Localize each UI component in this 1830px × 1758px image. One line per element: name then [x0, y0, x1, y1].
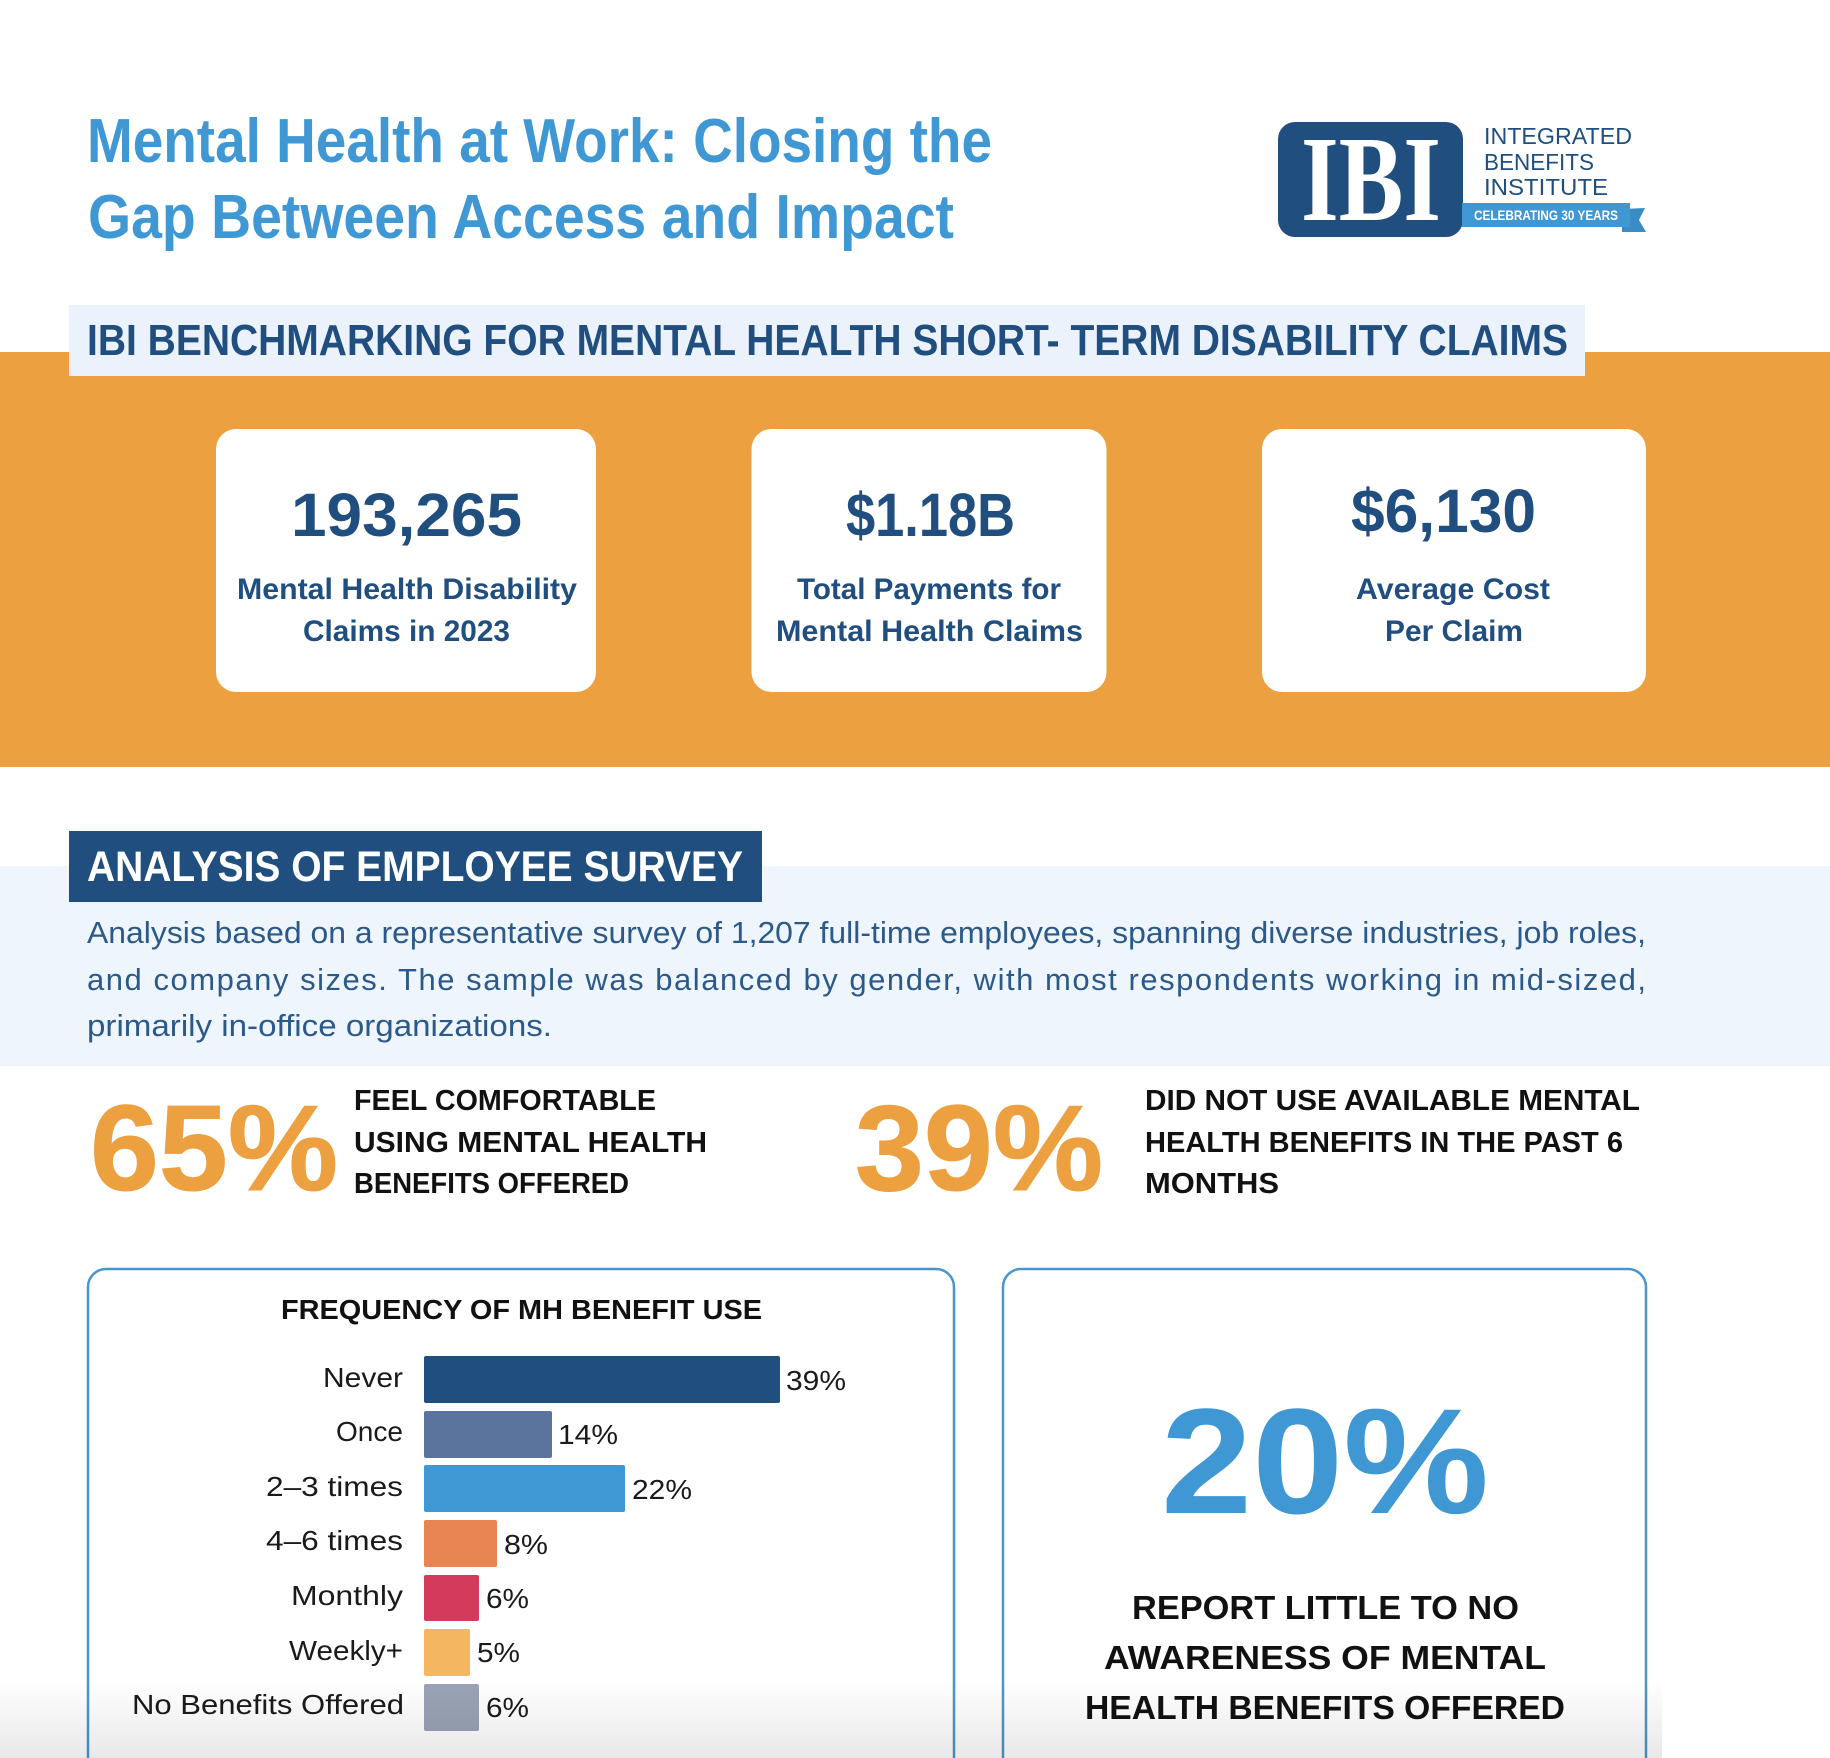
stat: 65% comfortable: FEEL COMFORTABLE — [354, 1085, 656, 1117]
panel: frequency bar chart — [88, 1269, 954, 1758]
bar: Never: 39% — [786, 1365, 846, 1396]
stat card: claims: 193,265 — [291, 481, 522, 549]
logo: IBI: INSTITUTE — [1484, 174, 1608, 200]
logo: IBI: CELEBRATING 30 YEARS — [1474, 207, 1618, 223]
heading: benchmarking: IBI BENCHMARKING FOR MENTAL HEALTH SHORT- TERM DISABILITY CLAIMS — [87, 316, 1568, 365]
stat card: total payments — [752, 429, 1106, 692]
stat: 39% did not use — [855, 1080, 1640, 1216]
bar: 4-6 times: 4–6 times — [266, 1525, 403, 1556]
stat card: claims — [216, 429, 596, 692]
panel: 20% awareness: REPORT LITTLE TO NO — [1132, 1589, 1519, 1626]
stat: 39% did not use: HEALTH BENEFITS IN THE PAST 6 — [1145, 1127, 1623, 1159]
panel: 20% awareness: AWARENESS OF MENTAL — [1104, 1639, 1546, 1676]
bar: No Benefits Offered: 6% — [486, 1692, 529, 1723]
stat card: average cost: Average Cost — [1356, 573, 1550, 606]
bar: 4-6 times — [266, 1520, 548, 1567]
panel: 20% awareness: HEALTH BENEFITS OFFERED — [1085, 1689, 1565, 1726]
panel: 20% awareness: 20% — [1161, 1377, 1489, 1545]
bar: Never: Never — [323, 1362, 403, 1393]
bar: Weekly+: 5% — [477, 1637, 520, 1668]
bar: Once: Once — [336, 1416, 403, 1447]
stat: 39% did not use: 39% — [855, 1080, 1103, 1216]
survey description: Analysis based on a representative survey of 1,207 full-time employees, spanning diverse industries, job roles, — [87, 915, 1646, 950]
stat card: average cost: $6,130 — [1351, 477, 1536, 545]
bar: Monthly: Monthly — [291, 1580, 403, 1611]
title — [87, 107, 992, 252]
bar: 2-3 times: 22% — [632, 1474, 692, 1505]
survey description — [87, 915, 1646, 1043]
title: Gap Between Access and Impact — [88, 183, 954, 252]
title: Mental Health at Work: Closing the — [87, 107, 992, 176]
stat card: claims: Mental Health Disability — [237, 573, 577, 606]
bar: Weekly+ — [289, 1629, 520, 1676]
heading: benchmarking — [69, 305, 1585, 376]
bar: Once: 14% — [558, 1419, 618, 1450]
bar: 2-3 times: 2–3 times — [266, 1471, 403, 1502]
bar: No Benefits Offered — [132, 1684, 529, 1731]
survey description: and company sizes. The sample was balanced by gender, with most respondents working in mid-sized, — [87, 962, 1646, 997]
bar: Once — [336, 1411, 618, 1458]
bar: Never — [323, 1356, 846, 1403]
bar: Weekly+: Weekly+ — [289, 1635, 403, 1666]
stat card: average cost — [1262, 429, 1646, 692]
bar: No Benefits Offered: No Benefits Offered — [132, 1689, 404, 1720]
panel: frequency bar chart: FREQUENCY OF MH BENEFIT USE — [281, 1294, 762, 1325]
bar: Monthly — [291, 1575, 529, 1621]
logo: IBI — [1278, 112, 1646, 247]
stat card: total payments: $1.18B — [846, 481, 1015, 549]
stat: 65% comfortable: BENEFITS OFFERED — [354, 1168, 629, 1200]
logo: IBI: INTEGRATED — [1484, 123, 1632, 149]
logo: IBI: BENEFITS — [1484, 149, 1594, 175]
heading: analysis — [69, 831, 762, 902]
logo: IBI: IBI — [1301, 112, 1441, 247]
stat card: average cost: Per Claim — [1385, 615, 1523, 648]
stat card: claims: Claims in 2023 — [303, 615, 510, 648]
panel: 20% awareness — [1003, 1269, 1646, 1758]
stat: 65% comfortable: USING MENTAL HEALTH — [354, 1127, 707, 1159]
stat card: total payments: Mental Health Claims — [776, 615, 1083, 648]
stat: 65% comfortable — [90, 1080, 707, 1216]
bar: Monthly: 6% — [486, 1583, 529, 1614]
panel: analysis of employee survey — [0, 831, 1830, 1066]
stat: 39% did not use: DID NOT USE AVAILABLE MENTAL — [1145, 1085, 1640, 1117]
panel: benchmarking orange band — [0, 305, 1830, 767]
stat: 39% did not use: MONTHS — [1145, 1168, 1279, 1200]
bar: 2-3 times — [266, 1465, 692, 1512]
stat card: total payments: Total Payments for — [797, 573, 1061, 606]
stat: 65% comfortable: 65% — [90, 1080, 338, 1216]
heading: analysis: ANALYSIS OF EMPLOYEE SURVEY — [87, 843, 743, 891]
survey description: primarily in-office organizations. — [87, 1008, 552, 1043]
bar: 4-6 times: 8% — [504, 1529, 548, 1560]
